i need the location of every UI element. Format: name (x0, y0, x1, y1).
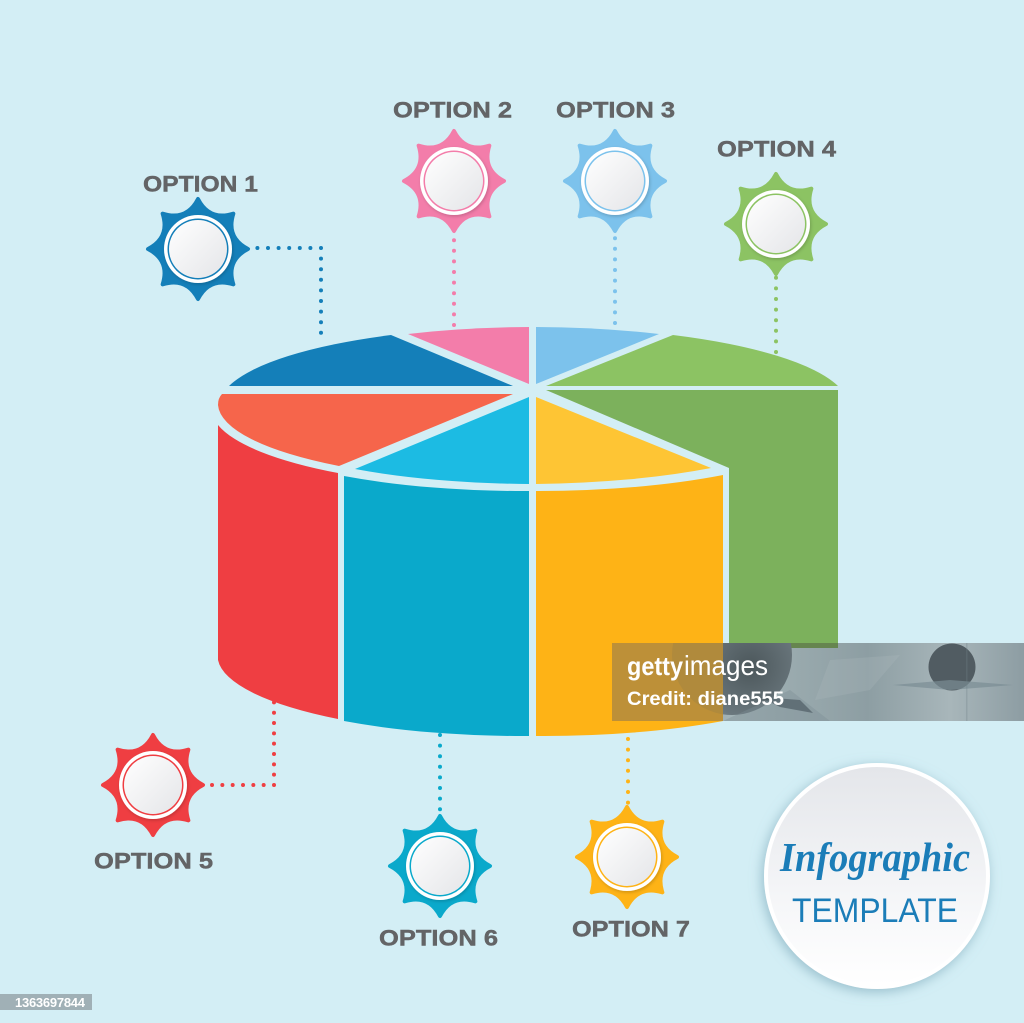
segment: option 6 teal side (344, 476, 529, 736)
segment: option 5 coral top (218, 394, 513, 466)
segment: option 2 pink top (408, 327, 529, 384)
badge: option 3 (565, 131, 665, 231)
connector: option 6 (438, 735, 442, 825)
image id tag: 1363697844 (15, 995, 86, 1010)
watermark banner (612, 643, 1024, 721)
label: option 6: OPTION 6 (379, 926, 498, 950)
badge: option 5 (103, 735, 203, 835)
connector: option 7 (626, 739, 630, 820)
watermark logo text: images (684, 650, 768, 681)
badge: option 7 (577, 807, 677, 907)
title disc (764, 763, 990, 989)
label: option 3: OPTION 3 (556, 98, 675, 122)
title: Infographic: Infographic (779, 834, 970, 880)
label: option 2: OPTION 2 (393, 98, 512, 122)
segment: option 4 green side (546, 390, 838, 646)
segment: option 6 cyan top (355, 397, 529, 484)
segment: option 1 blue top (229, 335, 513, 386)
connector: option 5 (212, 702, 274, 785)
watermark logo text (627, 650, 768, 681)
watermark credit text: Credit: diane555 (627, 688, 784, 710)
3D pie cylinder chart (218, 327, 838, 736)
connector: option 3 (613, 225, 617, 323)
segment: option 4 green top (546, 335, 838, 386)
badge: option 2 (404, 131, 504, 231)
watermark logo text: getty (627, 651, 683, 681)
badge: option 4 (726, 174, 826, 274)
segment: option 5 red side (218, 425, 338, 719)
segment: option 7 yellow top (536, 397, 711, 484)
label: option 7: OPTION 7 (572, 916, 690, 942)
label: option 4: OPTION 4 (717, 136, 837, 162)
connector: option 4 (774, 270, 778, 352)
badge: option 6 (390, 816, 490, 916)
connector: option 1 (255, 248, 321, 336)
label: option 1: OPTION 1 (143, 172, 258, 196)
label: option 5: OPTION 5 (94, 848, 213, 874)
segment: option 7 amber side (536, 475, 723, 736)
connector: option 2 (452, 225, 456, 325)
badge: option 1 (148, 199, 248, 299)
title: TEMPLATE: TEMPLATE (792, 892, 958, 930)
segment: option 3 light blue top (536, 327, 659, 384)
